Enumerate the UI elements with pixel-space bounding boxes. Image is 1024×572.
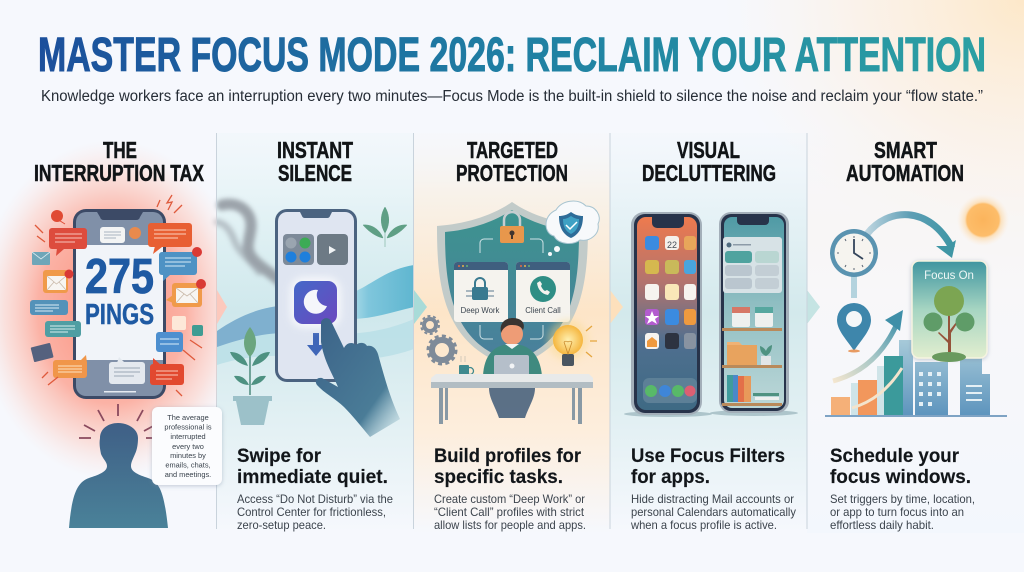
heading: targeted protection: TARGETED (467, 137, 558, 163)
red glow background (0, 152, 217, 468)
hand pointing (316, 318, 400, 437)
window: deep work (454, 262, 508, 322)
plant top right (363, 207, 407, 247)
headline: focus filters (631, 445, 785, 488)
heading: the interruption tax: THE (103, 137, 137, 163)
plant in pot (230, 327, 272, 425)
heading: visual decluttering: DECLUTTERING (642, 160, 776, 186)
heading: smart automation (846, 137, 964, 186)
clock (830, 229, 878, 298)
body: schedule: effortless daily habit. (830, 519, 934, 532)
man at laptop (483, 318, 542, 378)
body: build profiles: Create custom “Deep Work” or (434, 493, 585, 506)
body: schedule: or app to turn focus into an (830, 506, 964, 519)
body: build profiles: “Client Call” profiles with strict (434, 506, 585, 519)
callout: average professional (152, 407, 222, 485)
city buildings and bar chart (825, 304, 1007, 417)
rising arrow (833, 310, 903, 408)
padlock (500, 212, 524, 243)
body: swipe: Access “Do Not Disturb” via the (237, 493, 393, 506)
callout: average professional: interrupted (170, 432, 206, 441)
phone with 275 pings: 275 (85, 250, 154, 304)
gears (421, 316, 456, 364)
body: swipe: zero-setup peace. (237, 519, 326, 532)
smoke (217, 204, 291, 293)
heading: instant silence: SILENCE (278, 160, 352, 186)
body: focus filters: Hide distracting Mail accounts or (631, 493, 794, 506)
lightbulb (548, 320, 597, 366)
panel: targeted protection (414, 133, 610, 533)
teal panel background (217, 133, 414, 533)
headline: focus filters: for apps. (631, 466, 710, 488)
location pin (837, 303, 871, 352)
headline: swipe (237, 445, 388, 488)
sun (957, 194, 1009, 246)
moon icon (290, 277, 341, 328)
mug (459, 356, 474, 378)
peach panel background (414, 133, 610, 533)
body: focus filters (630, 493, 796, 532)
headline: build profiles (434, 445, 581, 488)
heading: instant silence (277, 137, 353, 186)
phone: decluttered with shelves (710, 212, 798, 416)
notification bubbles (30, 195, 206, 396)
body: schedule: Set triggers by time, location, (830, 493, 975, 506)
body: focus filters: when a focus profile is active. (630, 519, 777, 532)
phone with 275 pings: PINGS (85, 299, 154, 331)
phone: home screen with apps (624, 212, 712, 417)
callout: average professional: minutes by (170, 451, 206, 460)
headline: build profiles: Build profiles for (434, 445, 581, 467)
waves (217, 265, 414, 365)
body: swipe: Control Center for frictionless, (237, 506, 386, 519)
arrow chevron into smart automation (807, 290, 820, 324)
focus on card (912, 261, 987, 362)
panel: visual decluttering (610, 133, 807, 533)
body: build profiles (434, 493, 586, 532)
panel: instant silence (217, 133, 414, 533)
callout: average professional: and meetings. (165, 470, 211, 479)
callout: average professional: professional is (164, 422, 212, 432)
panel: the interruption tax (0, 137, 247, 528)
callout: average professional: emails, chats, (165, 460, 211, 470)
phone with control center (275, 209, 357, 382)
headline: focus filters: Use Focus Filters (631, 445, 785, 467)
headline: swipe: Swipe for (237, 445, 321, 467)
curved arrow from clock to focus card (867, 215, 956, 258)
subtitle: Knowledge workers face an interruption every two minutes—Focus Mode is the built-in shield to silence the noise and reclaim your “flow state.” (41, 88, 983, 105)
body: build profiles: allow lists for people and apps. (434, 519, 586, 532)
heading: visual decluttering (642, 137, 776, 186)
tree (924, 286, 974, 362)
window: client call (516, 262, 570, 322)
heading: targeted protection: PROTECTION (456, 160, 568, 186)
headline: schedule: focus windows. (830, 466, 971, 488)
person silhouette (69, 404, 168, 528)
headline: schedule (830, 445, 971, 488)
phone: home screen with apps: 22 (667, 240, 677, 250)
callout: average professional: every two (172, 442, 204, 451)
panel: smart automation (807, 133, 1024, 533)
heading: the interruption tax: INTERRUPTION TAX (34, 160, 204, 186)
arrow chevron into instant silence (217, 290, 227, 324)
headline: schedule: Schedule your (830, 445, 959, 467)
body: schedule (830, 493, 975, 532)
window: deep work: Deep Work (461, 306, 500, 315)
heading: visual decluttering: VISUAL (677, 137, 740, 163)
callout: average professional: The average (167, 413, 209, 422)
heading: smart automation: SMART (874, 137, 937, 163)
headline: swipe: immediate quiet. (237, 466, 388, 488)
heading: smart automation: AUTOMATION (846, 160, 964, 186)
phone with 275 pings (73, 209, 166, 399)
panel background (807, 133, 1024, 533)
teal panel background (610, 133, 807, 533)
window: client call: Client Call (525, 306, 561, 315)
heading: targeted protection (456, 137, 568, 186)
headline: build profiles: specific tasks. (434, 466, 563, 488)
arrow chevron into visual decluttering (610, 290, 623, 324)
heading: instant silence: INSTANT (277, 137, 353, 163)
focus on card: Focus On (924, 270, 974, 282)
thought cloud with shield (546, 201, 599, 256)
body: swipe (237, 493, 393, 532)
desk (431, 374, 593, 424)
shield (437, 202, 588, 367)
body: focus filters: personal Calendars automatically (631, 506, 796, 519)
arrow chevron into targeted protection (414, 290, 427, 324)
heading: the interruption tax (34, 137, 204, 186)
